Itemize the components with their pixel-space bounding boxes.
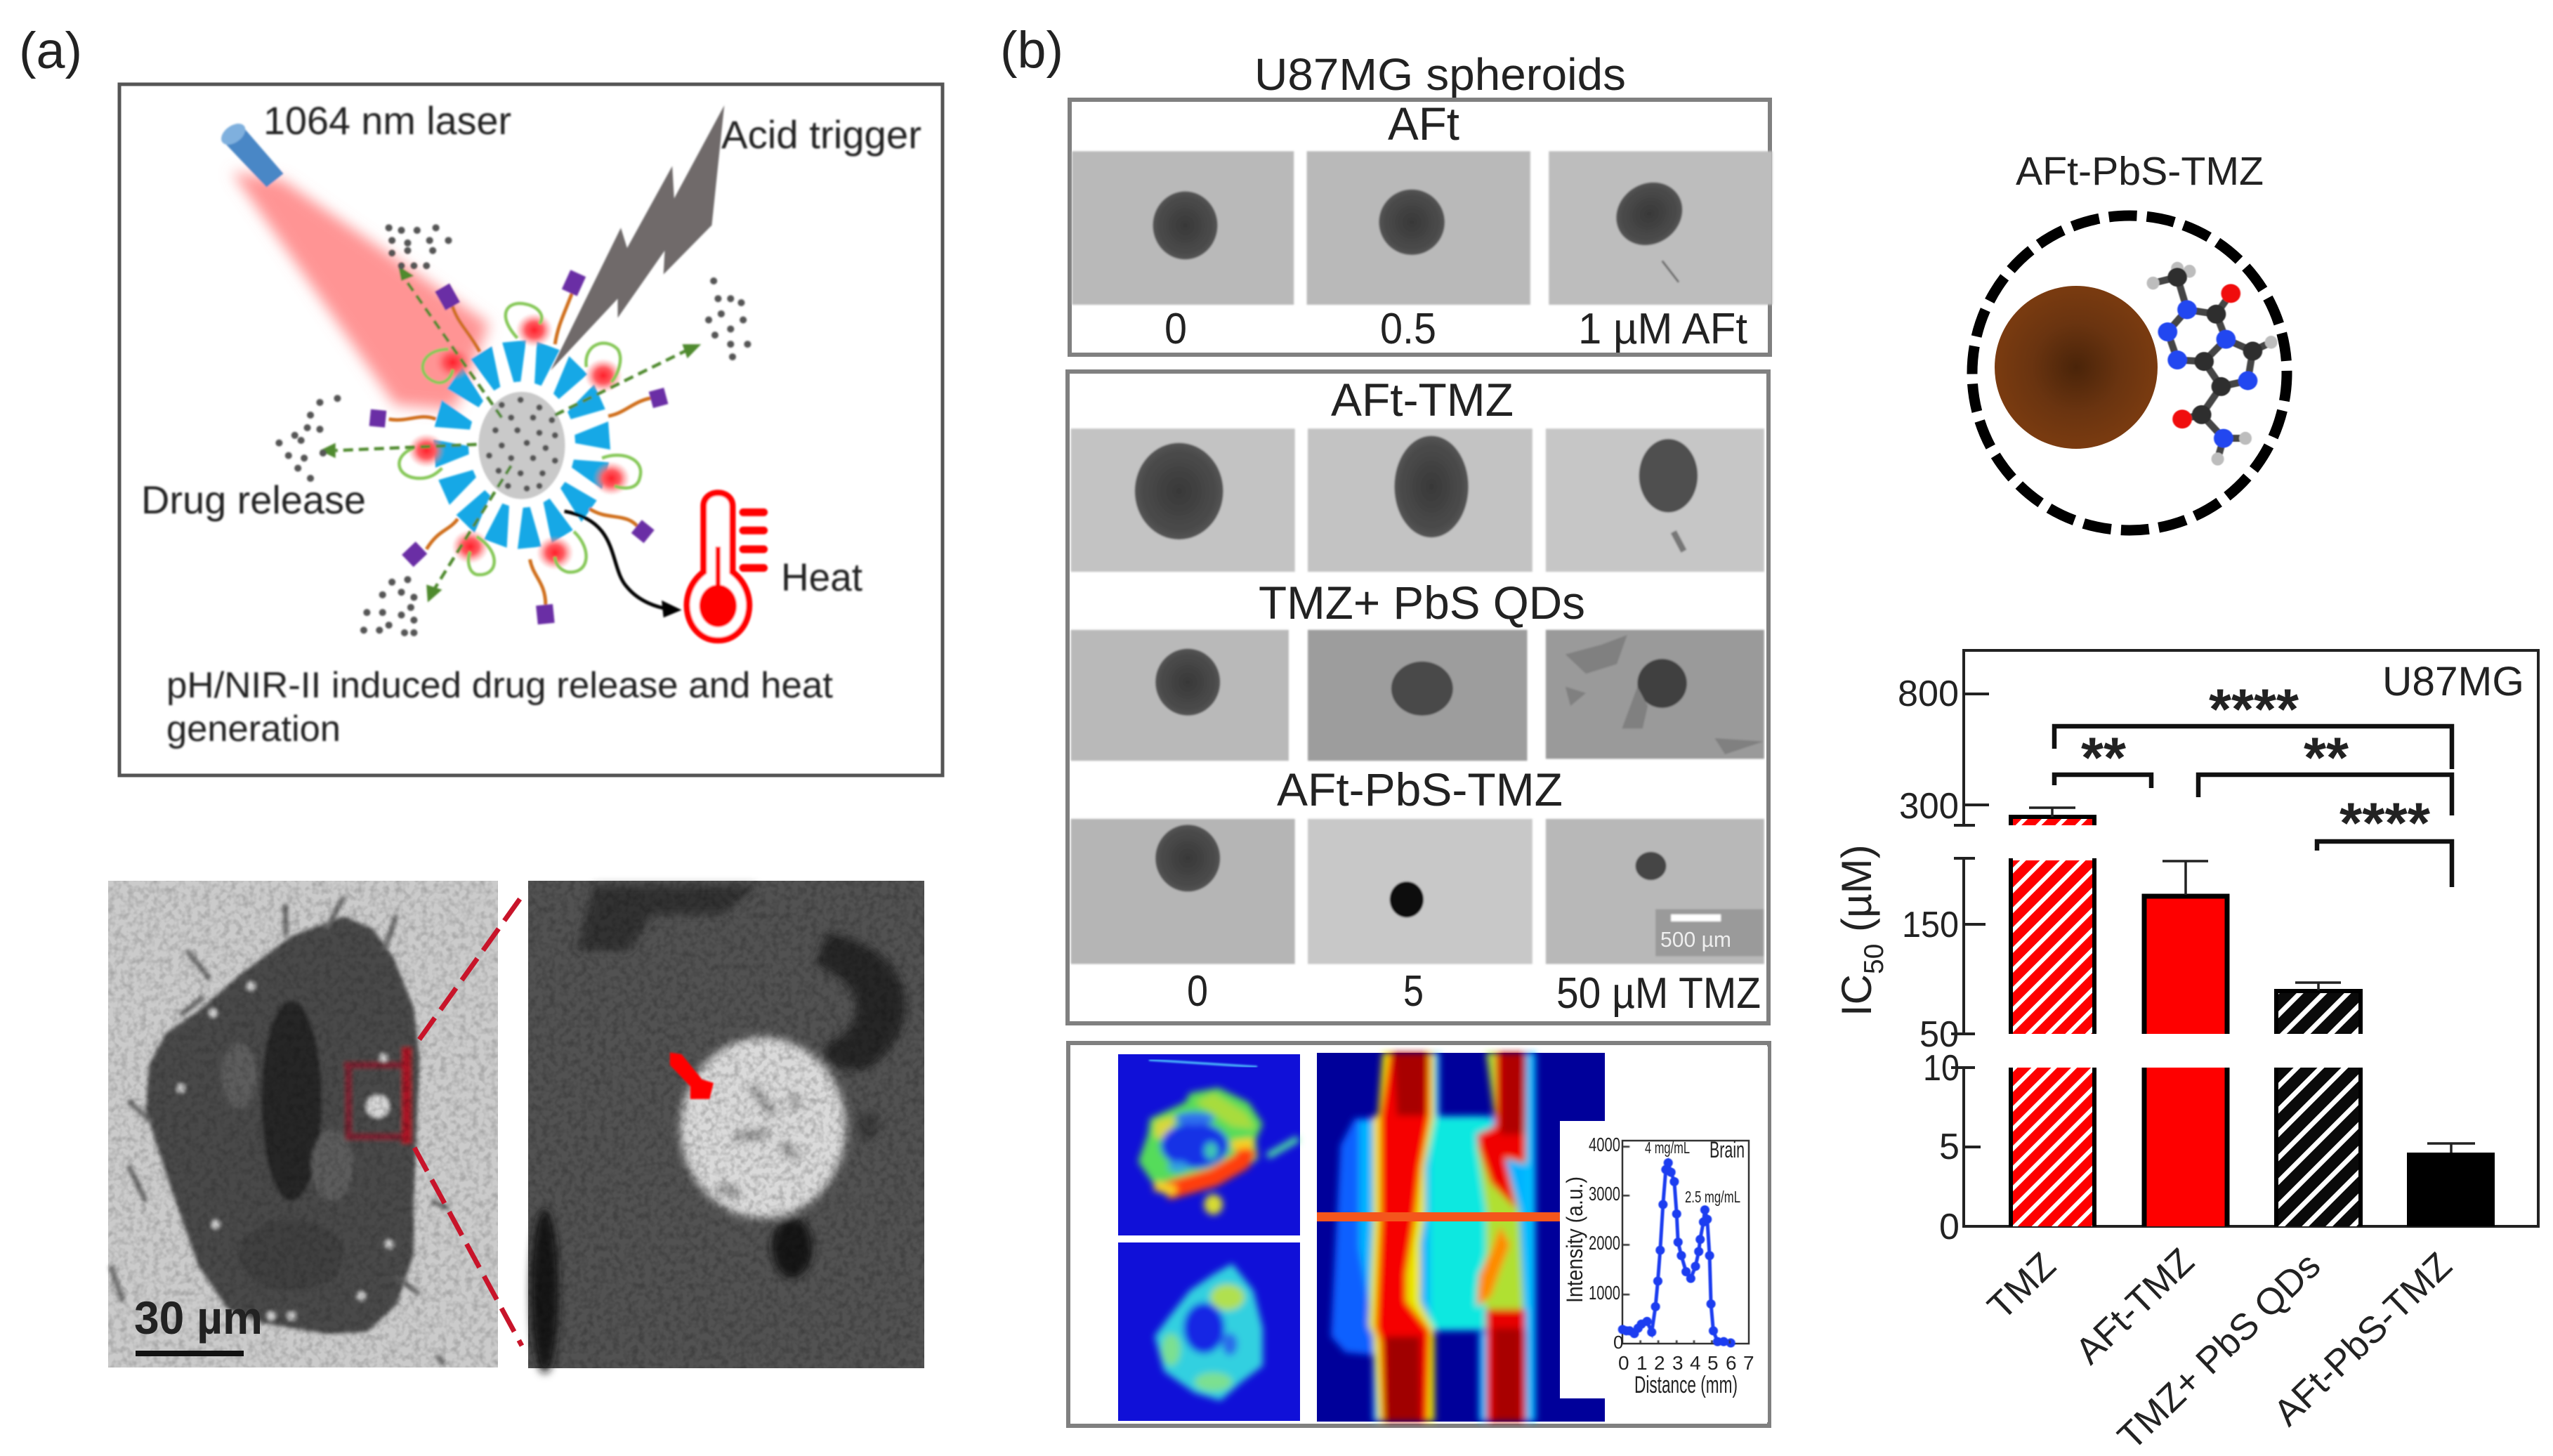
y tick labels: 3000 — [1589, 1183, 1620, 1205]
x tick labels: 7 — [1743, 1352, 1754, 1374]
bar: AFt-PbS-TMZ — [2407, 1143, 2495, 1226]
y tick labels: 2000 — [1589, 1232, 1620, 1254]
scale label 30 µm: 30 µm — [134, 1292, 263, 1344]
series title: AFt — [1388, 98, 1459, 150]
x tick labels: 0 — [1618, 1352, 1629, 1374]
x tick labels: AFt-PbS-TMZ — [2266, 1245, 2460, 1434]
y tick labels: 150 — [1902, 905, 1959, 945]
structure title: AFt-PbS-TMZ — [2016, 149, 2264, 194]
significance stars: ** — [2304, 726, 2349, 790]
dose 5: 5 — [1403, 967, 1424, 1016]
dose labels — [1164, 98, 1747, 353]
dose 0: 0 — [1187, 967, 1208, 1016]
panel label (b): (b) — [1000, 22, 1063, 79]
line chart: intensity vs distance — [1562, 1134, 1754, 1398]
significance brackets — [2054, 726, 2452, 887]
y tick labels: 300 — [1899, 786, 1959, 827]
panel: electron micrographs — [108, 881, 924, 1373]
y axis title: Intensity (a.u.) — [1562, 1176, 1587, 1303]
x tick labels: 5 — [1707, 1352, 1719, 1374]
y tick labels: 800 — [1898, 674, 1959, 714]
x tick labels: 6 — [1726, 1352, 1737, 1374]
dose 0.5: 0.5 — [1380, 305, 1436, 353]
frame — [1070, 100, 1770, 355]
dose 50 µM TMZ: 50 µM TMZ — [1556, 969, 1761, 1018]
y tick labels: 50 — [1919, 1014, 1959, 1055]
panel label (a): (a) — [19, 22, 82, 79]
icon: thermometer — [687, 493, 764, 641]
red arrow — [670, 1052, 714, 1099]
x tick labels: 4 — [1690, 1352, 1701, 1374]
chart tag: U87MG: U87MG — [2382, 659, 2524, 704]
heat map: brain slice top — [1118, 1054, 1300, 1235]
x tick labels: AFt-TMZ — [2068, 1240, 2202, 1372]
panel: photoacoustic imaging — [1068, 1043, 1769, 1426]
tag: Brain: Brain — [1709, 1137, 1745, 1162]
heat map: phantom tubes — [1317, 1053, 1605, 1422]
dose 0: 0 — [1164, 305, 1187, 353]
y tick labels — [1589, 1134, 1623, 1353]
micrograph: whole cell — [108, 881, 498, 1368]
panel: TMZ spheroid series — [1068, 372, 1768, 1023]
panel: IC50 bar chart — [1833, 650, 2538, 1456]
drug-loaded core and ligands — [370, 273, 666, 624]
x tick labels — [1980, 1240, 2460, 1456]
spheroid images — [1071, 428, 1764, 964]
x tick labels: TMZ — [1980, 1245, 2063, 1327]
panel: AFt-PbS-TMZ nanoparticle structure — [1972, 149, 2287, 530]
y tick labels: 10 — [1923, 1048, 1960, 1089]
nanoparticle wedges — [433, 340, 610, 549]
axis ticks — [1951, 694, 1989, 1147]
y tick labels — [1898, 674, 1960, 1247]
scale bar — [136, 1351, 244, 1356]
bar: AFt-TMZ — [2144, 861, 2227, 1226]
scale bar label: 500 µm — [1660, 927, 1731, 952]
TMZ molecule — [2147, 262, 2278, 466]
caption: pH/NIR-II induced drug release and heat — [166, 665, 834, 706]
drug release arrows and drug clouds — [279, 228, 747, 633]
y tick labels: 5 — [1939, 1127, 1960, 1167]
y axis title: IC — [1833, 974, 1880, 1016]
spheroid images — [1072, 151, 1773, 305]
y tick labels: 4000 — [1589, 1134, 1620, 1155]
annotation: 2.5 mg/mL: 2.5 mg/mL — [1685, 1188, 1740, 1206]
caption: generation — [166, 709, 341, 749]
y axis title: 50 — [1859, 944, 1889, 974]
significance stars: **** — [2209, 678, 2299, 742]
faint streak — [1149, 1060, 1257, 1067]
x tick labels: TMZ+ PbS QDs — [2110, 1245, 2328, 1456]
schematic labels — [141, 98, 921, 749]
frame — [1068, 372, 1768, 1023]
schematic frame — [119, 84, 943, 775]
significance stars: ** — [2081, 726, 2126, 790]
y tick labels: 0 — [1613, 1332, 1623, 1353]
frame — [1068, 1043, 1769, 1426]
panel: AFt spheroid series — [1070, 98, 1773, 355]
label: acid trigger: Acid trigger — [721, 112, 921, 157]
dose 1 µM: 1 µM AFt — [1578, 305, 1747, 353]
icon: acid trigger lightning bolt — [551, 105, 724, 371]
panel: pH/NIR-II drug release schematic — [119, 84, 943, 775]
y axis title: (µM) — [1833, 844, 1880, 944]
label: drug release: Drug release — [141, 478, 366, 522]
bar: TMZ — [2011, 808, 2094, 1226]
caption — [166, 665, 834, 749]
row title: AFt-PbS-TMZ: AFt-PbS-TMZ — [1277, 763, 1563, 815]
chart frame and broken y axis — [1964, 650, 2538, 1226]
PbS core — [1995, 286, 2158, 449]
row title: AFt-TMZ: AFt-TMZ — [1331, 374, 1514, 426]
y tick labels: 1000 — [1589, 1282, 1620, 1304]
laser beam — [232, 172, 489, 410]
heat arrow — [565, 511, 682, 617]
intensity profile — [1622, 1147, 1731, 1344]
plot frame — [1622, 1141, 1749, 1344]
x tick labels: 1 — [1636, 1352, 1648, 1374]
bar: TMZ+ PbS QDs — [2276, 983, 2361, 1226]
label: heat: Heat — [781, 555, 862, 599]
micrograph: zoomed vesicle — [528, 881, 924, 1373]
annotation: 4 mg/mL: 4 mg/mL — [1645, 1139, 1690, 1157]
label: laser: 1064 nm laser — [263, 98, 511, 143]
x axis title: Distance (mm) — [1634, 1372, 1738, 1398]
white inset background — [1560, 1121, 1768, 1398]
x tick labels: 3 — [1672, 1352, 1684, 1374]
significance stars — [2081, 678, 2430, 855]
zoom guide lines — [414, 896, 522, 1346]
heading: U87MG spheroids: U87MG spheroids — [1254, 49, 1626, 100]
dashed apoferritin shell — [1972, 216, 2287, 530]
x tick labels — [1618, 1352, 1754, 1374]
x tick labels: 2 — [1654, 1352, 1665, 1374]
row title: TMZ+ PbS QDs: TMZ+ PbS QDs — [1259, 577, 1585, 629]
heat map: brain slice bottom — [1118, 1242, 1300, 1421]
icon: laser emitter — [216, 120, 284, 188]
nanoparticle diagram — [216, 105, 764, 641]
y tick labels: 0 — [1939, 1207, 1960, 1247]
significance stars: **** — [2339, 792, 2430, 855]
